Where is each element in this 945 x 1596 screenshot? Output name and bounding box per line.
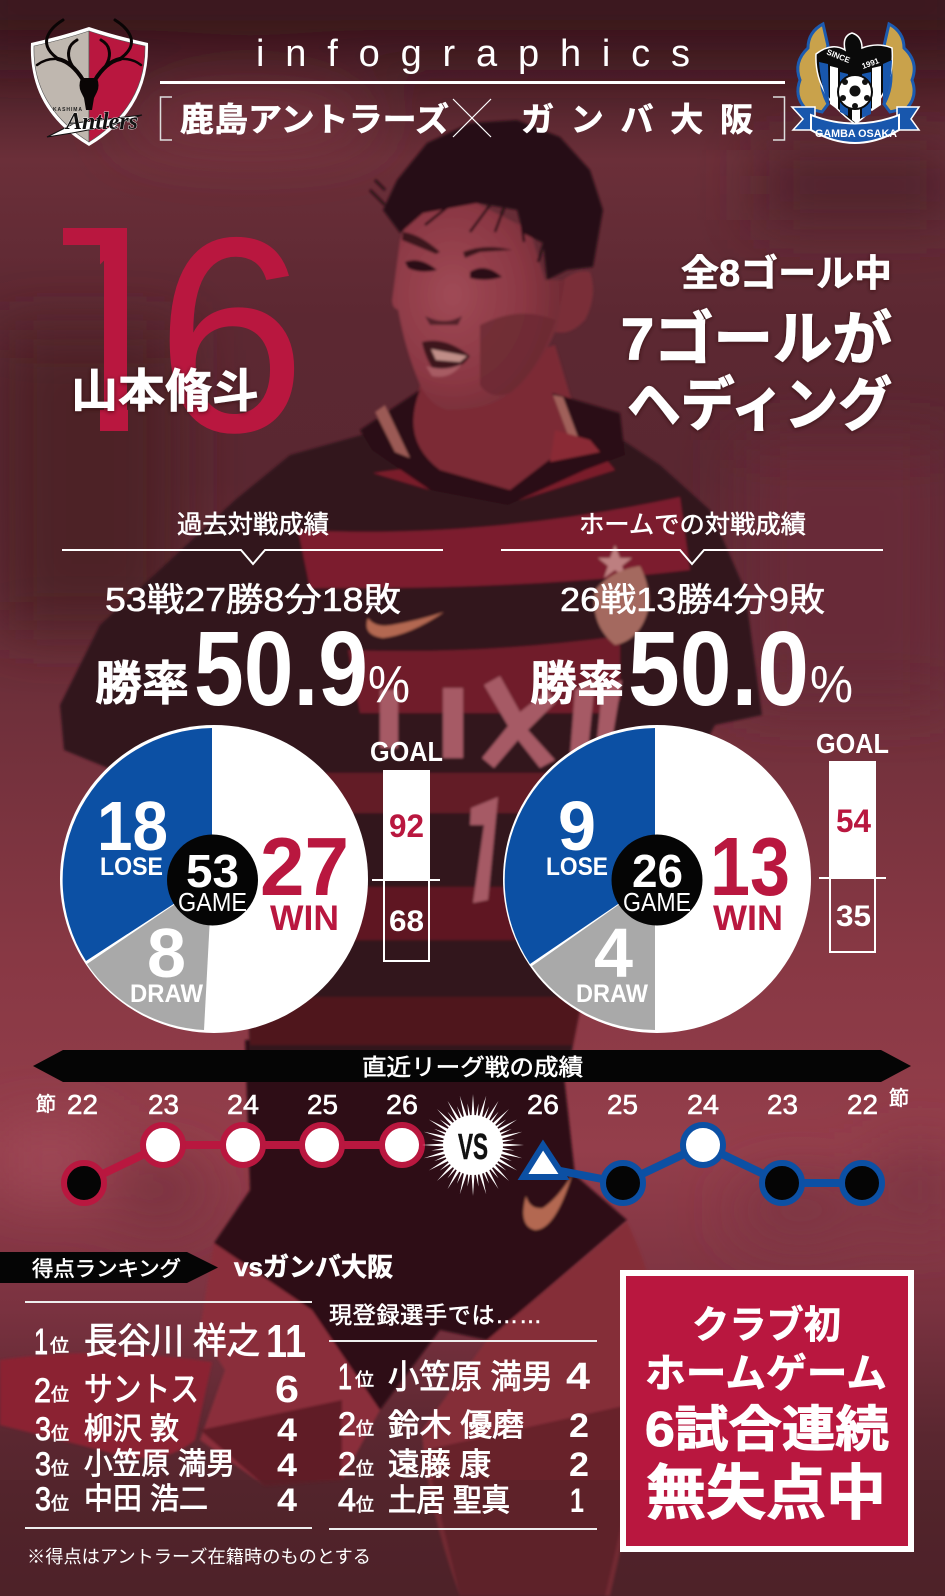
headline: goals by heading: 7ゴールが — [621, 307, 892, 372]
row 2: 2 — [338, 1406, 356, 1442]
row 1: 1 — [34, 1321, 48, 1362]
row 4: 1 — [570, 1482, 584, 1520]
ranking table: current squad: 現登録選手では…… — [329, 1302, 542, 1328]
pie chart — [503, 725, 811, 1033]
section heading — [62, 511, 443, 564]
round labels: 25 — [607, 1089, 638, 1120]
results timeline: Gamba — [523, 1125, 882, 1203]
win rate — [530, 610, 853, 728]
pie chart: DRAW — [576, 980, 648, 1008]
row 2: サントス — [84, 1371, 199, 1409]
logo: Gamba Osaka crest — [792, 24, 919, 143]
pie chart — [60, 725, 368, 1033]
goal bar — [370, 736, 443, 961]
row 5: 中田 浩二 — [84, 1483, 208, 1516]
face — [392, 200, 565, 410]
row 4: 位 — [356, 1495, 374, 1515]
row 2: 位 — [356, 1419, 374, 1439]
round labels: 26 — [527, 1089, 559, 1120]
pie chart: GAME — [178, 887, 247, 917]
win rate: 勝率 — [530, 657, 624, 710]
row 1: 長谷川 祥之 — [84, 1320, 260, 1361]
goal bar: 35 — [836, 900, 871, 933]
row 4: 4 — [277, 1447, 297, 1483]
goal bar: 92 — [389, 808, 424, 844]
round labels: 24 — [687, 1089, 719, 1120]
pie chart: 13 — [710, 820, 790, 913]
heading: match-up teams: 鹿島アントラーズ — [180, 101, 449, 138]
player number 16: 1 — [52, 176, 167, 491]
record text: 53戦27勝8分18敗 — [105, 581, 401, 618]
red sock — [0, 1353, 212, 1458]
row 2: 2 — [569, 1407, 589, 1445]
row 5: 4 — [277, 1482, 297, 1518]
goal bar: 68 — [389, 905, 424, 938]
section heading: ホームでの対戦成績 — [579, 511, 806, 539]
row 4 — [35, 1446, 297, 1483]
row 1: 位 — [355, 1370, 374, 1390]
record text: 26戦13勝4分9敗 — [560, 581, 825, 618]
win rate: % — [368, 656, 410, 714]
pie chart: 27 — [260, 820, 349, 913]
round labels — [36, 1087, 909, 1120]
goal bar: GOAL — [816, 728, 889, 759]
ribbon — [792, 107, 919, 130]
row 5: 位 — [51, 1494, 69, 1514]
ranking table: all-time — [25, 1301, 312, 1529]
round labels: 22 — [847, 1089, 878, 1120]
ear — [555, 271, 593, 333]
win rate: % — [810, 656, 853, 714]
logo text: KASHIMA — [53, 107, 82, 113]
icon: soccer ball — [838, 75, 872, 109]
row 3 — [35, 1411, 297, 1448]
heading: match-up teams — [160, 97, 784, 140]
torso — [60, 395, 762, 1060]
headline: goals by heading: 全8ゴール中 — [681, 252, 892, 294]
logo: Gamba Osaka crest: SINCE — [825, 48, 852, 65]
neck — [413, 345, 580, 503]
collar — [360, 390, 625, 505]
panel: home record — [501, 511, 889, 1033]
banner: recent league results — [33, 1050, 911, 1082]
row 4: 4 — [338, 1482, 356, 1518]
results timeline: Kashima — [64, 1125, 422, 1203]
heading: scoring ranking: vsガンバ大阪 — [234, 1252, 393, 1282]
far thigh — [422, 1222, 657, 1596]
round labels: 23 — [148, 1089, 179, 1120]
VS burst: VS — [458, 1126, 488, 1167]
star — [598, 545, 632, 578]
pie chart: GAME — [623, 887, 691, 917]
row 3: 柳沢 敦 — [84, 1413, 179, 1446]
win rate: 50.9 — [194, 610, 368, 728]
pie chart: WIN — [270, 899, 339, 938]
callout: club record: クラブ初 — [692, 1304, 841, 1347]
round labels: 26 — [386, 1089, 418, 1120]
heading: scoring ranking: 得点ランキング — [32, 1258, 181, 1281]
logo: Kashima Antlers crest — [31, 20, 148, 146]
player number 16: 6 — [156, 179, 306, 490]
laurels — [798, 24, 828, 112]
row 3: 2 — [569, 1446, 589, 1484]
heading: match-up teams: ガンバ大阪 — [521, 101, 753, 138]
row 4: 土居 聖真 — [388, 1483, 510, 1518]
footnote: ※得点はアントラーズ在籍時のものとする — [27, 1547, 371, 1567]
round labels: 節 — [36, 1093, 56, 1116]
row 4: 小笠原 満男 — [84, 1448, 235, 1481]
pie chart: WIN — [713, 899, 783, 938]
row 2: 鈴木 優磨 — [388, 1408, 524, 1443]
row 2: 位 — [51, 1385, 69, 1405]
pie chart: LOSE — [100, 853, 163, 881]
nose shadow — [425, 316, 462, 325]
row 4 — [338, 1482, 584, 1520]
section heading — [501, 511, 883, 564]
pie chart: 18 — [97, 787, 168, 865]
pie chart: 4 — [594, 914, 633, 992]
section heading: 過去対戦成績 — [177, 511, 329, 539]
row 1: 小笠原 満男 — [388, 1358, 553, 1395]
round labels: 23 — [767, 1089, 798, 1120]
row 3: 2 — [338, 1446, 356, 1482]
row 3 — [338, 1446, 589, 1484]
row 3: 位 — [356, 1459, 374, 1479]
panel: all-time record — [60, 511, 443, 1033]
win rate: 勝率 — [95, 657, 189, 710]
banner: recent league results: 直近リーグ戦の成績 — [362, 1054, 583, 1080]
round labels: 24 — [227, 1089, 259, 1120]
icon: antlers skull — [37, 20, 141, 110]
headline: goals by heading — [621, 252, 892, 438]
row 5 — [35, 1481, 297, 1518]
row 3: 位 — [51, 1424, 69, 1444]
swoosh on shirt — [367, 612, 444, 638]
row 1 — [34, 1315, 306, 1367]
win rate: 50.0 — [628, 610, 809, 728]
player number 16 — [63, 228, 294, 434]
title: infographics: infographics — [256, 33, 690, 75]
row 3: 遠藤 康 — [388, 1447, 491, 1482]
pie chart: 9 — [558, 787, 596, 865]
pie chart: 53 — [186, 845, 239, 897]
row 2: 6 — [275, 1369, 299, 1411]
hair — [383, 120, 603, 280]
heading: scoring ranking — [0, 1252, 393, 1283]
row 3: 3 — [35, 1411, 51, 1447]
player name: 山本脩斗 — [71, 365, 259, 417]
row 2 — [338, 1406, 589, 1445]
swoosh — [523, 1175, 572, 1230]
near thigh — [200, 1243, 380, 1486]
logo: Gamba Osaka crest: 1991 — [861, 56, 881, 71]
callout: club record: 無失点中 — [646, 1460, 886, 1527]
round labels: 節 — [889, 1087, 909, 1110]
row 2 — [34, 1369, 299, 1411]
row 1: 4 — [566, 1356, 590, 1398]
row 5: 3 — [35, 1481, 51, 1517]
shorts — [214, 1040, 627, 1410]
win rate — [95, 610, 410, 728]
row 1: 11 — [266, 1315, 306, 1367]
logo: Kashima Antlers crest: Antlers — [64, 109, 138, 135]
logo: Gamba Osaka crest: GAMBA OSAKA — [815, 128, 897, 140]
mouth — [422, 341, 470, 372]
row 3: 4 — [277, 1412, 297, 1448]
round labels: 25 — [307, 1089, 338, 1120]
shield — [816, 33, 892, 124]
round labels: 22 — [67, 1089, 98, 1120]
goal bar — [816, 728, 889, 952]
title: infographics — [160, 33, 785, 84]
VS burst — [422, 1094, 524, 1196]
goal bar: GOAL — [370, 736, 443, 767]
row 1 — [338, 1356, 590, 1398]
headline: goals by heading: ヘディング — [627, 373, 892, 438]
row 1: 位 — [50, 1336, 69, 1356]
pie chart: DRAW — [130, 980, 203, 1008]
crest on shirt — [594, 566, 649, 645]
row 4: 位 — [51, 1459, 69, 1479]
callout: club record — [623, 1273, 911, 1549]
eyes — [405, 260, 437, 272]
row 4: 3 — [35, 1446, 51, 1482]
goal bar: 54 — [836, 803, 871, 839]
pie chart: LOSE — [546, 853, 608, 881]
row 1: 1 — [338, 1356, 352, 1397]
sponsor letters — [380, 676, 622, 768]
pie chart: 8 — [147, 914, 186, 992]
ranking table: current squad — [329, 1302, 597, 1530]
shirt number — [470, 797, 498, 903]
callout: club record: ホームゲーム — [645, 1352, 887, 1396]
pie chart: 26 — [632, 845, 683, 897]
row 2: 2 — [34, 1372, 51, 1410]
callout: club record: 6試合連続 — [645, 1403, 889, 1457]
